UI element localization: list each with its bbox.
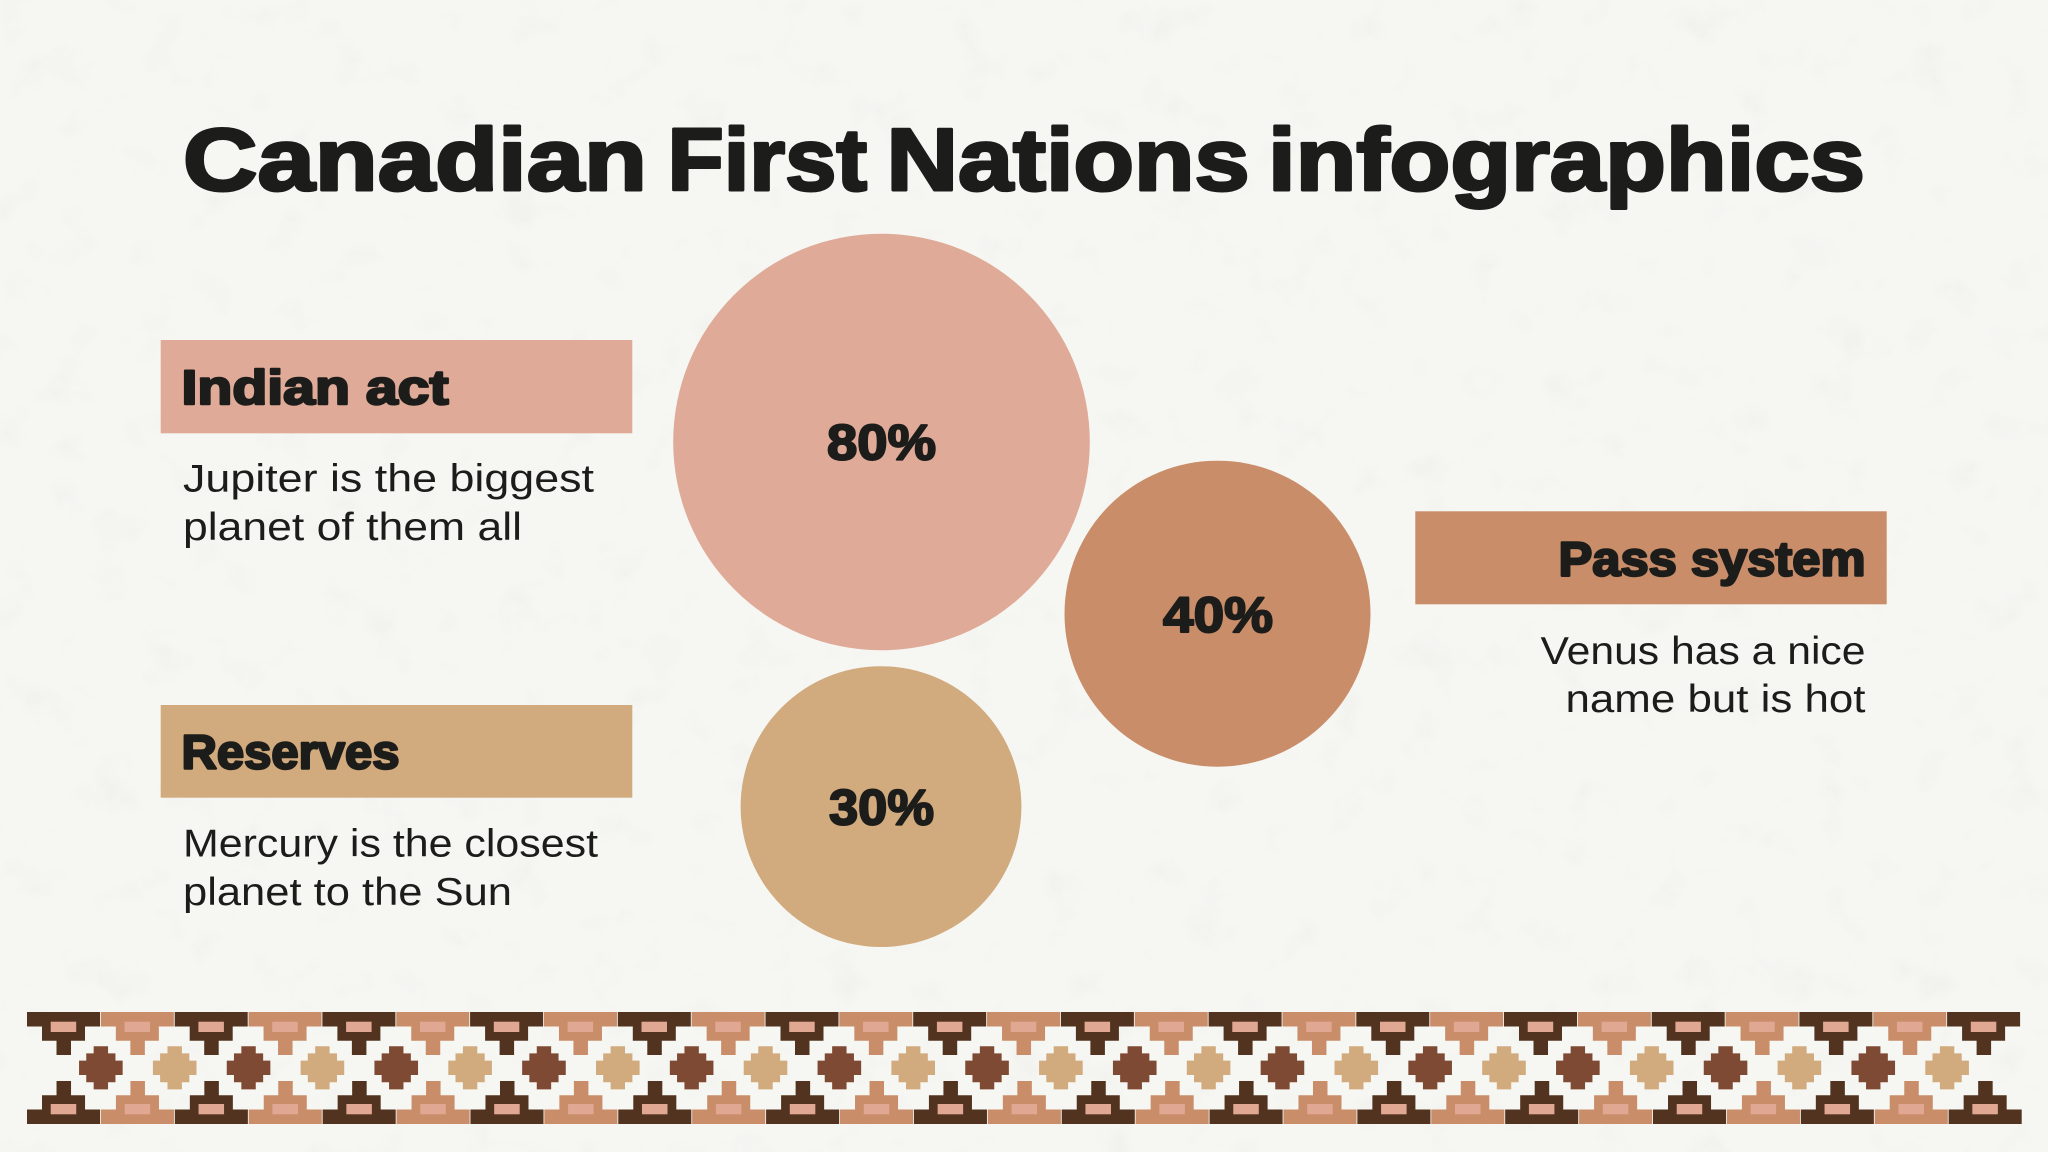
text block: Indian act description: Jupiter is the biggest [183,458,594,501]
circle: 40%: 40% [1163,587,1273,643]
text block: Reserves description: Mercury is the closest [183,823,598,866]
text block: Pass system description [1540,630,1866,721]
title: Canadian [183,110,647,209]
heading bar: Reserves [161,705,632,798]
heading bar: Reserves: Reserves [182,726,400,779]
circle: 30%: 30% [829,780,934,836]
text block: Indian act description [183,458,594,549]
panel: Indian act [161,340,632,549]
heading bar: Pass system: Pass system [1558,534,1866,587]
text block: Indian act description: planet of them all [183,506,522,549]
title: infographics [1268,110,1865,209]
bottom row of stepped shapes [27,1081,2022,1124]
decorative patterned band [27,1012,2022,1124]
circle: 80%: 80% [827,415,936,471]
top row of stepped shapes [27,1012,2020,1055]
circle: 40% [1064,461,1370,767]
row of diamonds [79,1046,1969,1089]
title: First [668,110,867,209]
title [183,110,1865,209]
heading bar: Indian act: Indian act [182,362,449,415]
heading bar: Pass system [1415,511,1887,604]
circle: 80% [673,234,1090,650]
text block: Reserves description [183,823,598,914]
text block: Pass system description: Venus has a nice [1540,630,1866,673]
heading bar: Indian act [161,340,632,433]
title: Nations [886,110,1250,209]
panel: Reserves [161,705,632,914]
circle: 30% [741,666,1021,947]
panel: Pass system [1415,511,1887,721]
text block: Reserves description: planet to the Sun [183,871,512,914]
text block: Pass system description: name but is hot [1566,678,1866,721]
